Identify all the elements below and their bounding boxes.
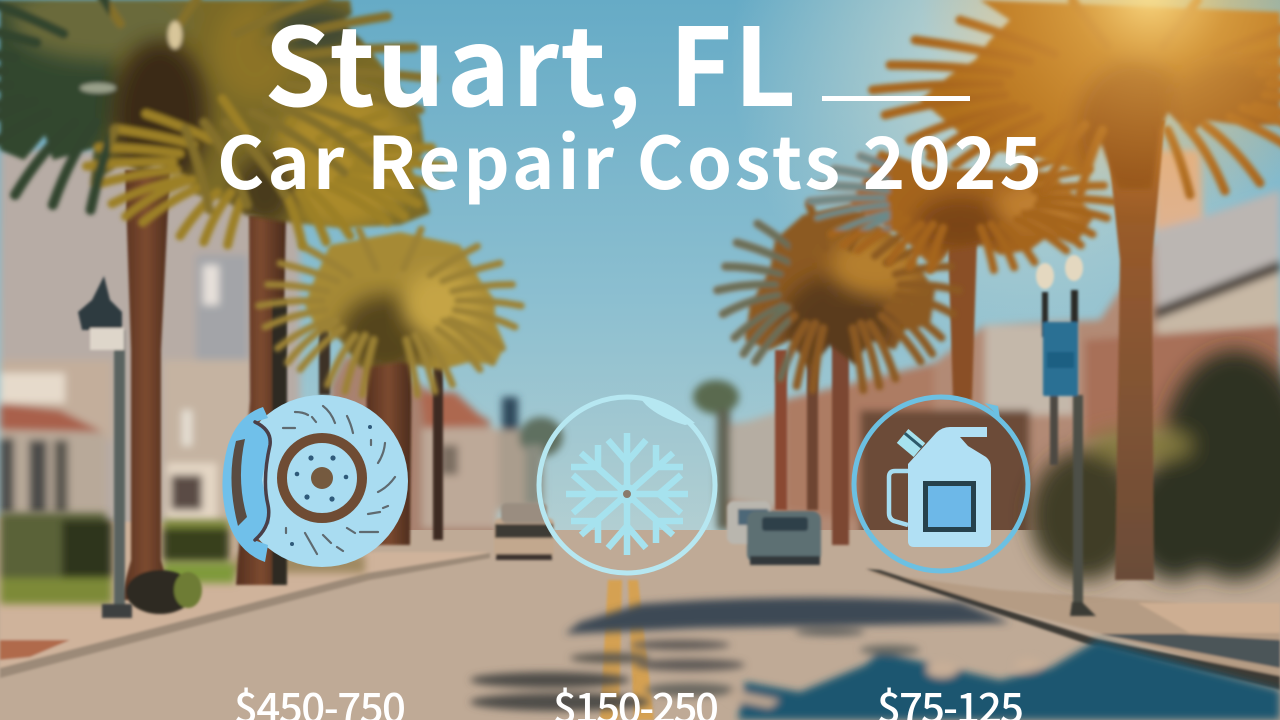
road: yellow centre line xyxy=(600,580,654,720)
palm: far right group crown xyxy=(700,190,960,400)
lamp: right with sign xyxy=(1036,255,1096,616)
palm: left large trunk xyxy=(120,170,202,614)
car: near right xyxy=(747,511,821,565)
subtitle: Car Repair Costs 2025: Car Repair Costs 2025 xyxy=(217,105,1042,210)
disc slots xyxy=(283,406,395,554)
car: far right xyxy=(727,501,771,544)
parked cars xyxy=(494,501,821,565)
icon: brake disc xyxy=(222,395,408,567)
bushes: right xyxy=(1030,350,1280,580)
icon: oil jug in circle xyxy=(854,397,1028,571)
jug handle xyxy=(889,471,908,525)
jug cap xyxy=(897,429,925,457)
street lamps xyxy=(78,255,1096,618)
palm: left large crown xyxy=(0,0,460,250)
palm: left centre crown xyxy=(259,225,525,400)
sun glow xyxy=(920,0,1280,240)
jug label xyxy=(926,484,974,530)
ring xyxy=(854,397,1028,571)
jug body xyxy=(908,427,991,547)
road: tree shadows xyxy=(470,597,1280,720)
lamp: left xyxy=(78,276,132,618)
ring xyxy=(539,397,715,573)
icon: snowflake in circle xyxy=(539,397,715,573)
disc centre hole xyxy=(311,467,333,489)
background: road and sidewalks xyxy=(0,513,1280,720)
caliper xyxy=(222,407,270,562)
car: left xyxy=(494,503,554,560)
ring highlight xyxy=(640,398,695,425)
disc hub ring xyxy=(282,438,362,518)
palms: background right trunks xyxy=(775,240,977,545)
palm: right large xyxy=(860,0,1280,580)
background: right buildings xyxy=(693,150,1280,560)
disc bolts xyxy=(290,425,372,546)
snowflake xyxy=(566,433,688,555)
title rule xyxy=(822,96,970,101)
brake pad xyxy=(231,439,247,526)
palm: left background trunks xyxy=(236,215,443,585)
background: left buildings xyxy=(0,150,563,550)
caliper outline xyxy=(255,422,270,540)
ring notch xyxy=(985,403,1000,418)
palm: right middle crown xyxy=(803,144,1116,277)
